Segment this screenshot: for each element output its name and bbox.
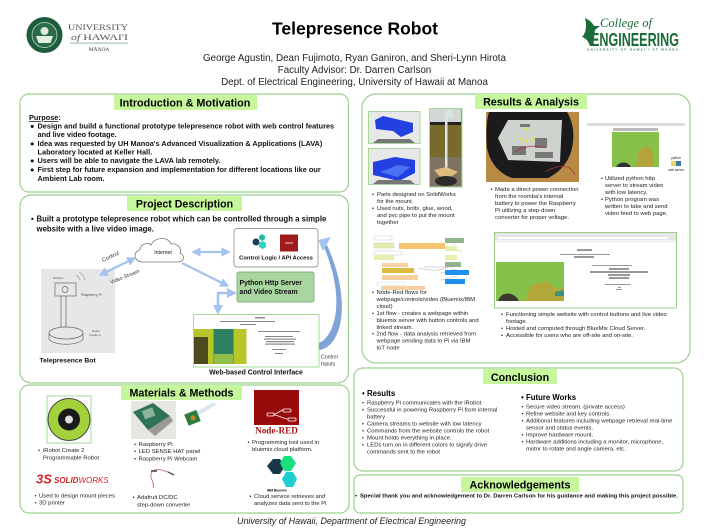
panel: acknowledgements xyxy=(354,475,683,513)
text: purpose: Users will be able to navigate the LAVA lab remotely. xyxy=(38,156,220,165)
label: control inputs xyxy=(321,354,338,368)
heading: materials and methods xyxy=(121,385,242,400)
text: Bluemix: • xyxy=(250,494,252,500)
text: node-red flows: Node-Red flows for xyxy=(376,290,427,296)
panel: project description xyxy=(20,195,348,383)
text: results: • xyxy=(362,442,364,448)
text: website: • xyxy=(501,312,503,318)
text: project summary xyxy=(31,214,327,234)
logo: Bluemix: IBM Bluemix xyxy=(267,488,287,492)
text: raspberry pi: • xyxy=(134,442,136,448)
text: future works: Future Works xyxy=(526,393,577,402)
text: purpose: ● xyxy=(30,165,34,174)
arrow: robot to internet xyxy=(102,259,133,274)
text: results: Results xyxy=(367,389,396,398)
label: video stream: Video Stream xyxy=(110,269,141,286)
arrow: control inputs curve xyxy=(318,237,342,350)
text: power connection: Pi utilizing a step-down xyxy=(495,208,555,214)
text: node-red flows: • xyxy=(372,332,374,338)
image: mount photo xyxy=(430,108,462,187)
image: mount model 1 xyxy=(368,112,420,144)
text: purpose: Laboratory located at Keller Hall. xyxy=(38,148,152,156)
text: results: Camera streams to website with low latency xyxy=(367,422,482,428)
heading: materials and methods: Materials & Methods xyxy=(130,388,234,400)
text: project summary: Built a prototype telepresence robot which can be controlled through a simple xyxy=(36,214,327,224)
image: roomba board xyxy=(486,112,579,182)
label: control inputs: Control xyxy=(321,354,338,360)
illustration: robot sketch: Robot xyxy=(92,329,100,333)
text: results: commands sent to the robot xyxy=(367,450,440,456)
icon: internet cloud xyxy=(135,238,184,262)
text: results xyxy=(362,389,497,456)
text: converter: • xyxy=(132,495,135,501)
heading: conclusion xyxy=(483,369,557,384)
arrow: internet to control logic xyxy=(195,251,227,253)
image: web control interface xyxy=(194,314,319,367)
image: functioning website screenshot xyxy=(494,232,676,308)
text: power connection: Made a direct power connection xyxy=(495,187,578,193)
illustration: robot sketch: WebCam xyxy=(53,277,63,280)
text: results: Mount holds everything in place. xyxy=(367,436,452,442)
text: Node-RED xyxy=(248,440,319,453)
text: future works: Secure video stream. (private access) xyxy=(526,404,625,410)
text: raspberry pi: • xyxy=(134,456,136,462)
image: raspberry pi xyxy=(131,401,176,439)
text: node-red flows: webpage/controls/video (Bluemix/IBM xyxy=(376,297,475,303)
icon: python web server xyxy=(668,156,685,172)
text: website: Functioning simple website with control buttons and live video xyxy=(506,312,667,318)
text: website: • xyxy=(501,333,503,339)
text: Bluemix xyxy=(250,494,326,507)
logo: Bluemix xyxy=(267,456,297,492)
text: python server: video feed to web page. xyxy=(605,211,668,217)
text: mount parts: Used nuts, bolts, glue, wood, xyxy=(377,206,453,212)
illustration: robot sketch: Raspberry Pi xyxy=(81,293,102,297)
text: results: • xyxy=(362,389,365,398)
text: purpose: Ambient Lab room. xyxy=(38,174,104,183)
text: converter xyxy=(132,495,190,508)
text: converter: step-down converter xyxy=(137,502,190,508)
heading: project description: Project Description xyxy=(136,198,233,210)
text: website: Hosted and computed through BlueMix Cloud Server. xyxy=(506,326,646,332)
text: raspberry pi: • xyxy=(134,449,136,455)
text: results: Raspberry Pi communicates with the iRobot xyxy=(367,400,482,406)
heading: introduction: Introduction & Motivation xyxy=(120,97,250,109)
text: purpose: ● xyxy=(30,122,34,131)
text: website xyxy=(501,312,667,339)
logo: SolidWorks: SOLIDWORKS xyxy=(54,476,109,485)
image: video stream page xyxy=(587,123,685,167)
authors xyxy=(203,53,507,88)
text: node-red flows: cloud) xyxy=(376,304,393,310)
text: future works: • xyxy=(522,440,524,446)
text: raspberry pi: Raspberry Pi Webcam xyxy=(138,456,197,462)
text: future works: Refine website and key controls. xyxy=(526,412,611,418)
text: future works: Hardware additions including a monitor, microphone, xyxy=(526,440,664,446)
text: future works: • xyxy=(522,404,524,410)
text: website: footage. xyxy=(506,319,528,325)
logo: University of Hawaii at Manoa: of HAWAI'I xyxy=(71,32,128,42)
text: SolidWorks: 3D printer xyxy=(39,500,65,506)
arrow: python server to interface xyxy=(218,293,233,311)
text: node-red flows: bluemix server with button controls and xyxy=(376,318,479,324)
text: iRobot: Programmable Robot xyxy=(43,456,99,462)
panel: results and analysis xyxy=(362,94,690,363)
text: python server: written to take and send xyxy=(604,204,668,210)
text: future works: • xyxy=(522,432,524,438)
text: thanks: Special thank you and acknowledgement to Dr. Darren Carlson for his guidance and making this project possible. xyxy=(360,494,678,500)
text: python server: • xyxy=(601,197,603,203)
box: control logic: Control Logic / API Access xyxy=(239,256,313,262)
image: webcam xyxy=(184,402,216,426)
text: raspberry pi xyxy=(134,442,200,462)
text: python server: server to stream video xyxy=(605,183,664,189)
logo: Node-RED: Node-RED xyxy=(255,426,298,436)
text: future works: Improve hardware mount. xyxy=(526,432,593,438)
text: raspberry pi: Raspberry Pi xyxy=(138,442,173,448)
text: purpose: Design and build a functional prototype telepresence robot with web control features xyxy=(38,122,334,131)
text: project summary: website with a live video image. xyxy=(36,224,154,234)
logo: SolidWorks: 3S xyxy=(36,472,52,486)
text: node-red flows: linked stream. xyxy=(376,325,414,331)
text: python server xyxy=(601,176,668,217)
text: SolidWorks: • xyxy=(34,494,37,500)
text: purpose: Idea was requested by UH Manoa's Advanced Visualization & Applications (LAVA) xyxy=(38,139,323,148)
title: Telepresence Robot xyxy=(272,18,438,38)
text: power connection: converter for proper voltage. xyxy=(495,215,569,221)
text: power connection xyxy=(490,187,578,221)
logo: University of Hawaii at Manoa: MĀNOA xyxy=(89,46,109,53)
text: node-red flows: • xyxy=(372,290,374,296)
text: results: LEDs turn on in different colors to signify drive xyxy=(367,442,488,448)
panel: materials and methods xyxy=(20,385,349,513)
box: python server: and Video Stream xyxy=(240,289,298,296)
text: python server: Utilized python http xyxy=(605,176,656,182)
text: SolidWorks: Used to design mount pieces xyxy=(39,494,115,500)
text: results: Commands from the website controls the robot xyxy=(367,428,489,434)
text: future works: Additional features including webpage retrieval real-time xyxy=(526,418,673,424)
text: mount parts: for the mount. xyxy=(377,199,414,205)
logo: Node-RED xyxy=(254,390,299,436)
heading: acknowledgements: Acknowledgements xyxy=(470,480,570,492)
chart: Node-RED flows xyxy=(374,236,469,290)
arrow: internet to python server xyxy=(182,263,226,285)
text: purpose: First step for future expansion and implementation for different locations like our xyxy=(38,165,321,174)
authors: Dept. of Electrical Engineering, University of Hawaii at Manoa xyxy=(221,77,488,88)
text: node-red flows: • xyxy=(372,311,374,317)
text: node-red flows xyxy=(372,290,479,352)
text: node-red flows: 2nd flow - data analysis retrieved from xyxy=(376,332,476,338)
text: project summary: • xyxy=(31,214,34,224)
text: node-red flows: webpage sending data to Pi via IBM xyxy=(376,338,471,344)
text: results: Successful in powering Raspberry Pi from internal xyxy=(367,408,497,414)
text: website: • xyxy=(501,326,503,332)
text: mount parts: • xyxy=(372,192,374,198)
text: node-red flows: IoT node xyxy=(376,346,400,352)
heading: project description xyxy=(127,196,242,211)
text: python server: Python program was xyxy=(605,197,659,203)
text: iRobot: iRobot Create 2 xyxy=(43,448,84,454)
panel: conclusion xyxy=(354,368,683,471)
text: power connection: from the roomba's internal xyxy=(495,194,563,200)
text: SolidWorks: • xyxy=(34,500,37,506)
box: control logic xyxy=(234,228,318,267)
caption: telepresence bot: Telepresence Bot xyxy=(40,358,96,364)
text: future works: sensor and status events. xyxy=(526,426,593,432)
text: purpose xyxy=(29,113,334,183)
label: control inputs: Inputs xyxy=(321,362,336,368)
authors: Faculty Advisor: Dr. Darren Carlson xyxy=(278,65,431,76)
image: step-down converter xyxy=(151,470,174,488)
illustration: robot sketch: Create 2 xyxy=(89,333,101,337)
text: results: battery xyxy=(367,414,385,420)
text: power connection: battery to power the Raspberry xyxy=(495,201,576,207)
text: future works: motor to rotate and angle camera, etc. xyxy=(526,446,626,452)
header xyxy=(26,16,679,88)
text: SolidWorks xyxy=(34,494,115,506)
text: results: • xyxy=(362,408,364,414)
text: Bluemix: Cloud service retrieves and xyxy=(254,494,325,500)
text: mount parts: together xyxy=(377,220,399,226)
heading: results and analysis xyxy=(475,94,587,109)
icon: python web server: python xyxy=(671,156,681,160)
text: future works xyxy=(521,393,673,452)
text: future works: • xyxy=(521,393,524,402)
text: Node-RED: Programming tool used in xyxy=(252,440,319,446)
text: results: • xyxy=(362,400,364,406)
text: mount parts: Parts designed on SolidWorks xyxy=(377,192,456,198)
logo: SolidWorks xyxy=(36,472,109,486)
text: mount parts: and pvc pipe to put the mount xyxy=(377,213,455,219)
caption: web-based control interface: Web-based Control Interface xyxy=(209,370,303,376)
box: python server: Python Http Server xyxy=(240,280,302,287)
text: purpose: ● xyxy=(30,156,34,165)
heading: acknowledgements xyxy=(461,477,579,492)
icon: python web server: web server xyxy=(668,168,685,172)
illustration: robot sketch xyxy=(41,269,115,353)
authors: George Agustin, Dean Fujimoto, Ryan Ganiron, and Sheri-Lynn Hirota xyxy=(203,53,507,64)
image: iRobot xyxy=(47,396,91,443)
text: iRobot xyxy=(38,448,99,462)
text: purpose: Purpose: xyxy=(29,113,61,122)
logo: University of Hawaii at Manoa: UNIVERSITY xyxy=(68,22,128,32)
text: mount parts: • xyxy=(372,206,374,212)
logo: College of Engineering: College of xyxy=(600,16,654,30)
text: Node-RED: bluemix cloud platform. xyxy=(252,447,313,453)
text: purpose: and live video footage. xyxy=(38,130,117,139)
heading: conclusion: Conclusion xyxy=(491,372,549,384)
text: results: • xyxy=(362,428,364,434)
text: Bluemix: analyzes data sent to the Pi xyxy=(254,501,326,507)
panel: introduction and motivation xyxy=(20,94,348,192)
text: thanks: • xyxy=(355,494,357,500)
text: raspberry pi: LED SENSE HAT panel xyxy=(138,449,200,455)
text: purpose: ● xyxy=(30,139,34,148)
text: website: Accessible for users who are off-site and on-site. xyxy=(506,333,633,339)
logo: College of Engineering: UNIVERSITY OF HAWAI'I AT MANOA xyxy=(587,48,679,52)
text: results: • xyxy=(362,436,364,442)
image: mount model 2 xyxy=(368,148,420,184)
text: node-red flows: 1st flow - creates a webpage within xyxy=(376,311,468,317)
text: power connection: • xyxy=(490,187,493,193)
text: python server: with low latency. xyxy=(604,190,648,196)
icon: internet cloud: Internet xyxy=(154,250,172,256)
box: python server xyxy=(237,272,314,302)
text: iRobot: • xyxy=(38,448,40,454)
footer: University of Hawaii, Department of Electrical Engineering xyxy=(237,516,466,526)
text: future works: • xyxy=(522,412,524,418)
text: mount parts xyxy=(372,192,456,226)
text: results: • xyxy=(362,422,364,428)
logo: University of Hawaii at Manoa xyxy=(26,17,128,53)
heading: results and analysis: Results & Analysis xyxy=(483,96,579,108)
text: future works: • xyxy=(522,418,524,424)
text: python server: • xyxy=(601,176,603,182)
text: converter: Adafruit DC/DC xyxy=(137,495,178,501)
label: control: Control xyxy=(101,251,120,264)
logo: College of Engineering xyxy=(582,16,679,52)
text: Node-RED: • xyxy=(248,440,250,446)
